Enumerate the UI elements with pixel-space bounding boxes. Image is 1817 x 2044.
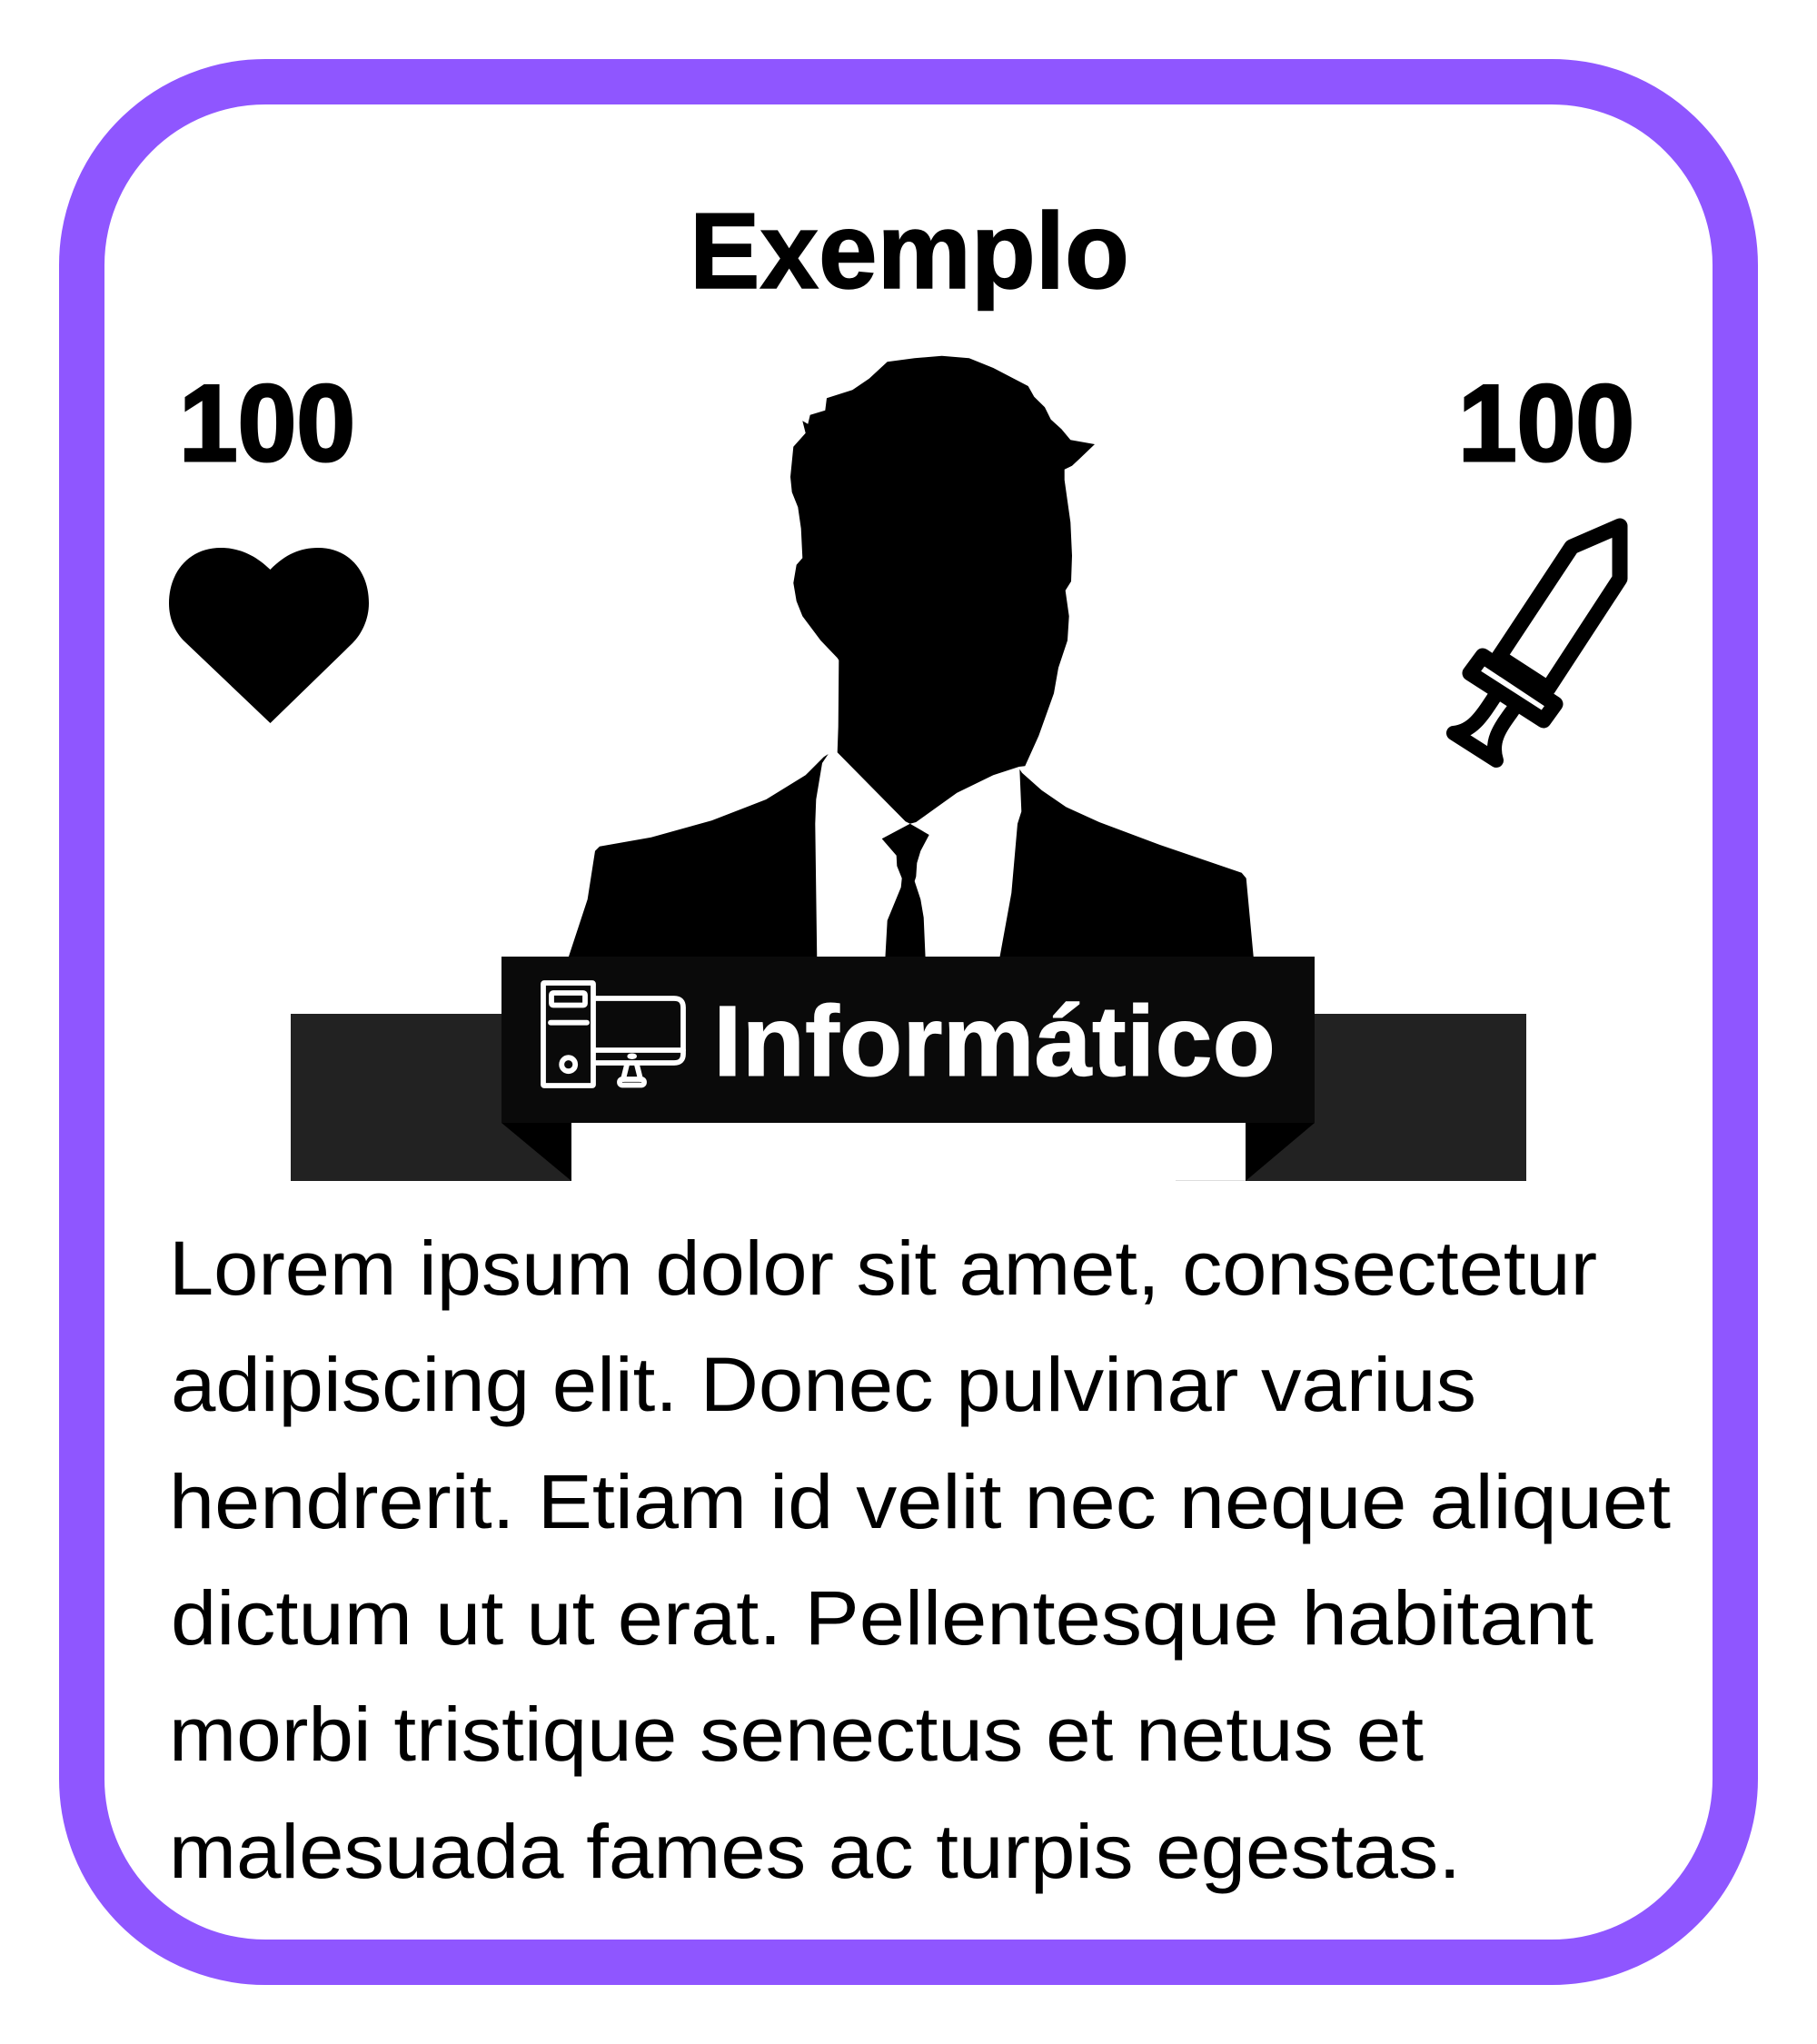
- right jacket: [999, 769, 1254, 959]
- icon: heart: [169, 548, 369, 723]
- title: Exemplo: [690, 191, 1129, 312]
- description text: adipiscing elit. Donec pulvinar varius: [171, 1342, 1476, 1427]
- description text: malesuada fames ac turpis egestas.: [169, 1809, 1461, 1894]
- health value: 100: [179, 362, 355, 484]
- ribbon right tail: [1246, 1014, 1526, 1181]
- head and neck: [790, 356, 1095, 824]
- ribbon fold right: [1246, 1123, 1315, 1181]
- description text: Lorem ipsum dolor sit amet, consectetur: [169, 1225, 1597, 1311]
- description text: dictum ut ut erat. Pellentesque habitant: [171, 1575, 1594, 1661]
- icon: desktop computer: [543, 983, 683, 1086]
- description text: morbi tristique senectus et netus et: [169, 1692, 1424, 1777]
- ribbon left tail: [291, 1014, 571, 1181]
- description text: [169, 1225, 1671, 1894]
- silhouette: man in suit: [568, 356, 1254, 959]
- left jacket: [568, 754, 829, 959]
- description text: hendrerit. Etiam id velit nec neque aliquet: [169, 1459, 1671, 1544]
- ribbon fold left: [501, 1123, 571, 1181]
- attack value: 100: [1458, 362, 1634, 484]
- ribbon banner: [291, 957, 1526, 1181]
- profession label: Informático: [713, 986, 1276, 1097]
- icon: sword: [1454, 526, 1620, 760]
- tie: [882, 824, 929, 959]
- ribbon centre: [501, 957, 1315, 1123]
